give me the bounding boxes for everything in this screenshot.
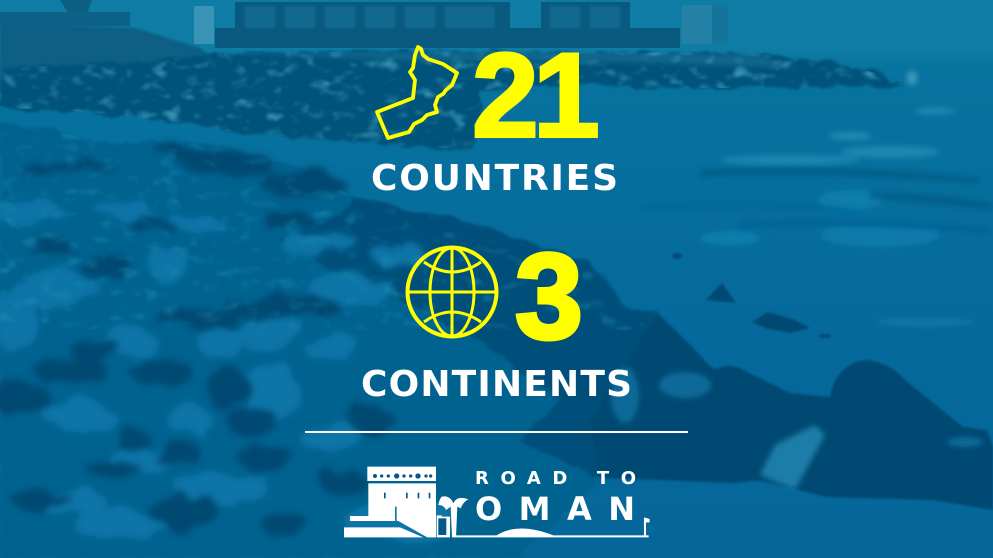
icon: Oman outline map	[377, 47, 457, 138]
stat number: 3: 3	[515, 228, 583, 364]
background: sea waves	[640, 108, 993, 327]
background: building windows	[245, 6, 620, 28]
icon: globe	[408, 248, 496, 336]
logo: fort illustration	[344, 467, 468, 537]
background: breakwater and upper left rocks	[0, 50, 903, 150]
divider line	[305, 431, 688, 433]
logo: ground line and flag	[455, 517, 650, 537]
logo: Road to Oman	[344, 467, 650, 537]
background: boulder highlights	[611, 367, 983, 490]
background: dark rock shadows	[0, 144, 395, 537]
background: rock mottling	[0, 134, 632, 330]
background: breakwater texture	[0, 50, 902, 148]
background: light rock patches	[0, 201, 694, 542]
background: foam at breakwater tip	[907, 71, 917, 85]
logo: OMAN text: OMAN	[475, 490, 635, 528]
background: rock field	[0, 123, 760, 558]
background: right boulders	[590, 313, 993, 510]
background: left hill	[0, 25, 215, 72]
heading: CONTINENTS: CONTINENTS	[361, 364, 632, 405]
background: small rocks on sand	[672, 253, 831, 338]
background: seaside building	[0, 0, 728, 48]
stat number: 21: 21	[472, 28, 600, 162]
logo: ROAD TO text: ROAD TO	[475, 468, 636, 489]
background: centre dark rock mass	[280, 197, 760, 480]
heading: COUNTRIES: COUNTRIES	[371, 158, 618, 199]
